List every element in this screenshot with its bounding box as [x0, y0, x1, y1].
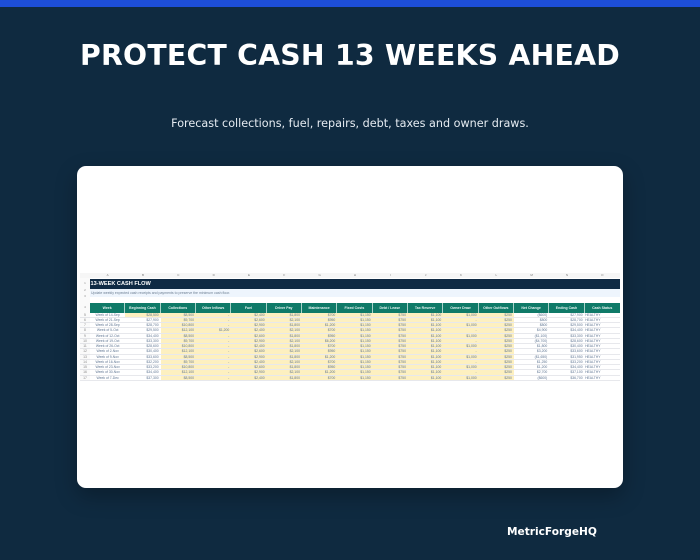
table rows: $750: [398, 365, 406, 369]
table header: Fuel: [245, 306, 252, 310]
table rows: $250: [504, 349, 512, 353]
table rows: HEALTHY: [585, 370, 600, 374]
table rows: $33,200: [146, 365, 159, 369]
table rows: $32,200: [146, 360, 159, 364]
column letters: L: [495, 273, 497, 277]
table rows: $10,800: [182, 365, 194, 369]
table rows: -: [475, 349, 477, 353]
table rows: $1,000: [466, 365, 477, 369]
table rows: $750: [398, 349, 406, 353]
table rows: $1,800: [290, 334, 300, 338]
table rows: $750: [398, 323, 406, 327]
table rows: $1,100: [431, 323, 441, 327]
card background: [77, 166, 623, 488]
table rows: $1,100: [431, 318, 441, 322]
column letters: H: [354, 273, 356, 277]
sheet title bar: [90, 278, 620, 289]
table rows: $250: [504, 334, 512, 338]
table rows: 11: [83, 344, 87, 348]
title: PROTECT CASH 13 WEEKS AHEAD: [80, 38, 620, 72]
table rows: HEALTHY: [585, 344, 600, 348]
table rows: $800: [540, 323, 547, 327]
table rows: $750: [398, 339, 406, 343]
table rows: $750: [398, 355, 406, 359]
table rows: $34,400: [146, 370, 159, 374]
table rows: HEALTHY: [585, 323, 600, 327]
table rows: -: [228, 360, 229, 364]
table rows: $9,700: [184, 360, 194, 364]
table header: Collections: [168, 306, 187, 310]
table rows: $950: [328, 365, 335, 369]
table rows: $750: [398, 334, 406, 338]
table rows: HEALTHY: [585, 318, 600, 322]
table rows: $27,900: [146, 318, 159, 322]
table rows: -: [228, 365, 229, 369]
table rows: $1,150: [360, 344, 371, 348]
table rows: $950: [328, 349, 335, 353]
table rows: $1,200: [325, 323, 335, 327]
sheet note: Update weekly expected cash receipts and payments to preserve the minimum cash floor.: [91, 291, 230, 295]
table rows: Week of 30-Nov: [96, 370, 120, 374]
table rows: $2,400: [254, 360, 265, 364]
table rows: $10,800: [182, 344, 194, 348]
table rows: $1,100: [431, 328, 441, 332]
sheet title bar: 13-WEEK CASH FLOW: [90, 280, 151, 286]
table rows: $12,100: [182, 349, 194, 353]
table rows: $750: [398, 328, 406, 332]
table rows: $36,700: [570, 376, 583, 380]
table rows: -: [475, 339, 477, 343]
table rows: $250: [504, 355, 512, 359]
table rows: -: [228, 349, 229, 353]
table rows: $1,100: [431, 376, 441, 380]
table rows: $2,100: [290, 339, 300, 343]
table rows: 7: [84, 323, 86, 327]
column letters: N: [566, 273, 568, 277]
table rows: Week of 2-Nov: [96, 349, 119, 353]
table rows: $1,150: [360, 323, 371, 327]
table rows: $250: [504, 323, 512, 327]
column letters: A: [107, 273, 109, 277]
table rows: $33,300: [570, 334, 583, 338]
table rows: $8,500: [184, 312, 194, 316]
row number gutter: [80, 278, 90, 380]
table rows: $12,100: [182, 370, 194, 374]
table header: Fixed Costs: [345, 306, 364, 310]
table rows: $33,600: [570, 349, 583, 353]
table rows: $950: [328, 334, 335, 338]
table rows: -: [475, 360, 477, 364]
table rows: $2,900: [254, 355, 265, 359]
table rows: $2,600: [254, 334, 265, 338]
table rows: -: [228, 334, 229, 338]
table rows: $250: [504, 370, 512, 374]
table rows: $700: [328, 328, 335, 332]
table rows: -: [228, 339, 229, 343]
table header: Tax Reserve: [415, 306, 435, 310]
table rows: 17: [83, 376, 87, 380]
table rows: $2,900: [254, 323, 265, 327]
table rows: $250: [504, 339, 512, 343]
column letters: G: [318, 273, 321, 277]
table header: Driver Pay: [275, 306, 292, 310]
table rows: $250: [504, 365, 512, 369]
column letters: J: [425, 273, 426, 277]
table rows: $2,100: [290, 360, 300, 364]
table rows: Week of 14-Sep: [96, 312, 120, 316]
table rows: $1,100: [431, 349, 441, 353]
table rows: $800: [540, 318, 547, 322]
table rows: $28,600: [570, 339, 583, 343]
column letters: D: [213, 273, 215, 277]
table rows: $1,000: [466, 334, 477, 338]
table rows: $1,800: [537, 344, 547, 348]
table rows: $30,400: [570, 344, 583, 348]
table rows: $1,100: [431, 365, 441, 369]
table rows: $2,700: [537, 370, 547, 374]
table rows: $2,100: [290, 370, 300, 374]
table header: Owner Draw: [450, 306, 471, 310]
table rows: $9,700: [184, 318, 194, 322]
table rows: $8,500: [184, 376, 194, 380]
table header: Cash Status: [592, 306, 612, 310]
table rows: $750: [398, 318, 406, 322]
table rows: -: [228, 344, 229, 348]
table rows: 10: [83, 339, 87, 343]
table rows: HEALTHY: [585, 355, 600, 359]
table rows: $2,600: [254, 365, 265, 369]
table rows: $250: [504, 376, 512, 380]
table rows: -: [228, 355, 229, 359]
table rows: Week of 16-Nov: [96, 360, 120, 364]
column letters: I: [390, 273, 391, 277]
table rows: $750: [398, 344, 406, 348]
table rows: $1,150: [360, 334, 371, 338]
table rows: ($600): [537, 376, 547, 380]
table rows: $28,700: [570, 318, 583, 322]
table rows: $250: [504, 328, 512, 332]
table rows: $2,100: [290, 349, 300, 353]
table header: Beginning Cash: [129, 306, 156, 310]
table header: Ending Cash: [556, 306, 577, 310]
table rows: HEALTHY: [585, 376, 600, 380]
table rows: Week of 23-Nov: [96, 365, 120, 369]
table rows: $33,300: [146, 339, 159, 343]
table rows: $1,000: [466, 312, 477, 316]
table rows: 15: [83, 365, 87, 369]
column letters: [80, 273, 620, 278]
table rows: HEALTHY: [585, 349, 600, 353]
table rows: Week of 9-Nov: [96, 355, 119, 359]
table rows: Week of 5-Oct: [97, 328, 118, 332]
table rows: $700: [328, 376, 335, 380]
table rows: $250: [504, 360, 512, 364]
table rows: HEALTHY: [585, 339, 600, 343]
sheet note: [90, 289, 620, 297]
column letters: F: [283, 273, 285, 277]
table rows: $1,800: [290, 323, 300, 327]
row number gutter: 3: [84, 294, 86, 298]
table rows: $1,800: [290, 376, 300, 380]
table rows: $1,150: [360, 339, 371, 343]
table rows: [80, 312, 620, 381]
table rows: -: [228, 323, 229, 327]
column letters: K: [460, 273, 462, 277]
table rows: HEALTHY: [585, 365, 600, 369]
table header: Other Inflows: [202, 306, 224, 310]
table rows: $1,200: [537, 365, 547, 369]
table rows: $1,100: [431, 355, 441, 359]
table rows: $1,100: [431, 344, 441, 348]
table rows: $27,900: [570, 312, 583, 316]
table rows: $700: [328, 360, 335, 364]
table rows: $1,000: [466, 355, 477, 359]
brand label: MetricForgeHQ: [507, 526, 597, 538]
table header: Debt / Lease: [379, 306, 400, 310]
table rows: $34,400: [570, 328, 583, 332]
table rows: $1,150: [360, 349, 371, 353]
table rows: ($4,700): [535, 339, 547, 343]
table rows: ($1,100): [535, 334, 547, 338]
table rows: $1,150: [360, 370, 371, 374]
table rows: $1,150: [360, 376, 371, 380]
table rows: $6,200: [325, 339, 335, 343]
table rows: HEALTHY: [585, 328, 600, 332]
table rows: $1,000: [466, 323, 477, 327]
table rows: $10,800: [182, 323, 194, 327]
table header: Maintenance: [309, 306, 330, 310]
table rows: Week of 12-Oct: [96, 334, 119, 338]
table rows: $1,150: [360, 355, 371, 359]
table rows: $700: [328, 312, 335, 316]
table rows: HEALTHY: [585, 360, 600, 364]
table rows: $28,600: [146, 344, 159, 348]
table rows: $1,150: [360, 328, 371, 332]
table rows: -: [475, 318, 477, 322]
table rows: $1,100: [431, 312, 441, 316]
table rows: $2,100: [290, 328, 300, 332]
column letters: B: [142, 273, 144, 277]
column letters: E: [248, 273, 250, 277]
table rows: $1,100: [431, 360, 441, 364]
table rows: -: [228, 318, 229, 322]
table rows: $950: [328, 318, 335, 322]
table rows: 14: [83, 360, 87, 364]
table rows: $750: [398, 376, 406, 380]
table rows: 9: [84, 334, 86, 338]
table rows: $2,600: [254, 349, 265, 353]
table rows: HEALTHY: [585, 312, 600, 316]
table rows: $250: [504, 312, 512, 316]
table header: Week: [103, 306, 112, 310]
table rows: $2,400: [254, 344, 265, 348]
table rows: -: [228, 370, 229, 374]
table rows: $33,600: [146, 355, 159, 359]
table rows: $1,150: [360, 312, 371, 316]
table rows: ($1,650): [535, 355, 547, 359]
table rows: 5: [84, 312, 86, 316]
table rows: $750: [398, 312, 406, 316]
table rows: $1,200: [219, 328, 229, 332]
table rows: $2,900: [254, 370, 265, 374]
table rows: $34,400: [146, 334, 159, 338]
table rows: $250: [504, 344, 512, 348]
table rows: HEALTHY: [585, 334, 600, 338]
table rows: Week of 21-Sep: [96, 318, 120, 322]
table rows: 16: [83, 370, 87, 374]
table rows: $250: [504, 318, 512, 322]
table rows: Week of 19-Oct: [96, 339, 119, 343]
table rows: $1,200: [325, 370, 335, 374]
subtitle: Forecast collections, fuel, repairs, debt, taxes and owner draws.: [171, 117, 529, 130]
table rows: ($600): [537, 312, 547, 316]
table header: Net Change: [521, 306, 541, 310]
table rows: $9,700: [184, 339, 194, 343]
table rows: 6: [84, 318, 86, 322]
table rows: $2,400: [254, 376, 265, 380]
table rows: $2,600: [254, 318, 265, 322]
table rows: $1,800: [290, 344, 300, 348]
table rows: $2,400: [254, 312, 265, 316]
table rows: $37,300: [146, 376, 159, 380]
table rows: $4,900: [537, 328, 547, 332]
table rows: $1,000: [466, 344, 477, 348]
table rows: $30,400: [146, 349, 159, 353]
table rows: Week of 26-Oct: [96, 344, 119, 348]
column letters: M: [530, 273, 533, 277]
column letters: C: [177, 273, 179, 277]
table rows: $1,150: [360, 365, 371, 369]
table rows: $1,250: [537, 360, 547, 364]
table rows: $700: [328, 344, 335, 348]
table rows: -: [228, 312, 229, 316]
table rows: $1,150: [360, 360, 371, 364]
table rows: $1,100: [431, 370, 441, 374]
table rows: $33,200: [570, 360, 583, 364]
table rows: $1,150: [360, 318, 371, 322]
table rows: $28,700: [146, 323, 159, 327]
table header: [90, 302, 620, 312]
table header: Other Outflows: [483, 306, 508, 310]
table rows: $2,400: [254, 328, 265, 332]
table rows: $2,900: [254, 339, 265, 343]
row number gutter: 1: [84, 281, 86, 285]
table rows: $1,100: [431, 334, 441, 338]
table rows: $1,200: [325, 355, 335, 359]
table rows: 12: [83, 349, 87, 353]
table rows: -: [475, 328, 477, 332]
table rows: $1,800: [290, 355, 300, 359]
table rows: $1,800: [290, 365, 300, 369]
table rows: $1,800: [290, 312, 300, 316]
top accent bar: [0, 0, 700, 6]
table rows: Week of 7-Dec: [96, 376, 119, 380]
table rows: -: [228, 376, 229, 380]
table rows: $1,100: [431, 339, 441, 343]
table rows: $2,100: [290, 318, 300, 322]
table rows: $1,000: [466, 376, 477, 380]
table rows: 13: [83, 355, 87, 359]
table rows: $8,500: [184, 334, 194, 338]
table rows: $31,950: [570, 355, 583, 359]
table rows: $12,100: [182, 328, 194, 332]
table rows: $3,200: [537, 349, 547, 353]
column letters: O: [601, 273, 603, 277]
table rows: $8,500: [184, 355, 194, 359]
table rows: $37,100: [570, 370, 583, 374]
table rows: $750: [398, 370, 406, 374]
table rows: 8: [84, 328, 86, 332]
table rows: $750: [398, 360, 406, 364]
row number gutter: 4: [84, 305, 86, 309]
table rows: $28,500: [146, 312, 159, 316]
table rows: $34,400: [570, 365, 583, 369]
table rows: $29,500: [570, 323, 583, 327]
table rows: $29,500: [146, 328, 159, 332]
row number gutter: 2: [84, 288, 86, 292]
table rows: Week of 28-Sep: [96, 323, 120, 327]
table rows: -: [475, 370, 477, 374]
